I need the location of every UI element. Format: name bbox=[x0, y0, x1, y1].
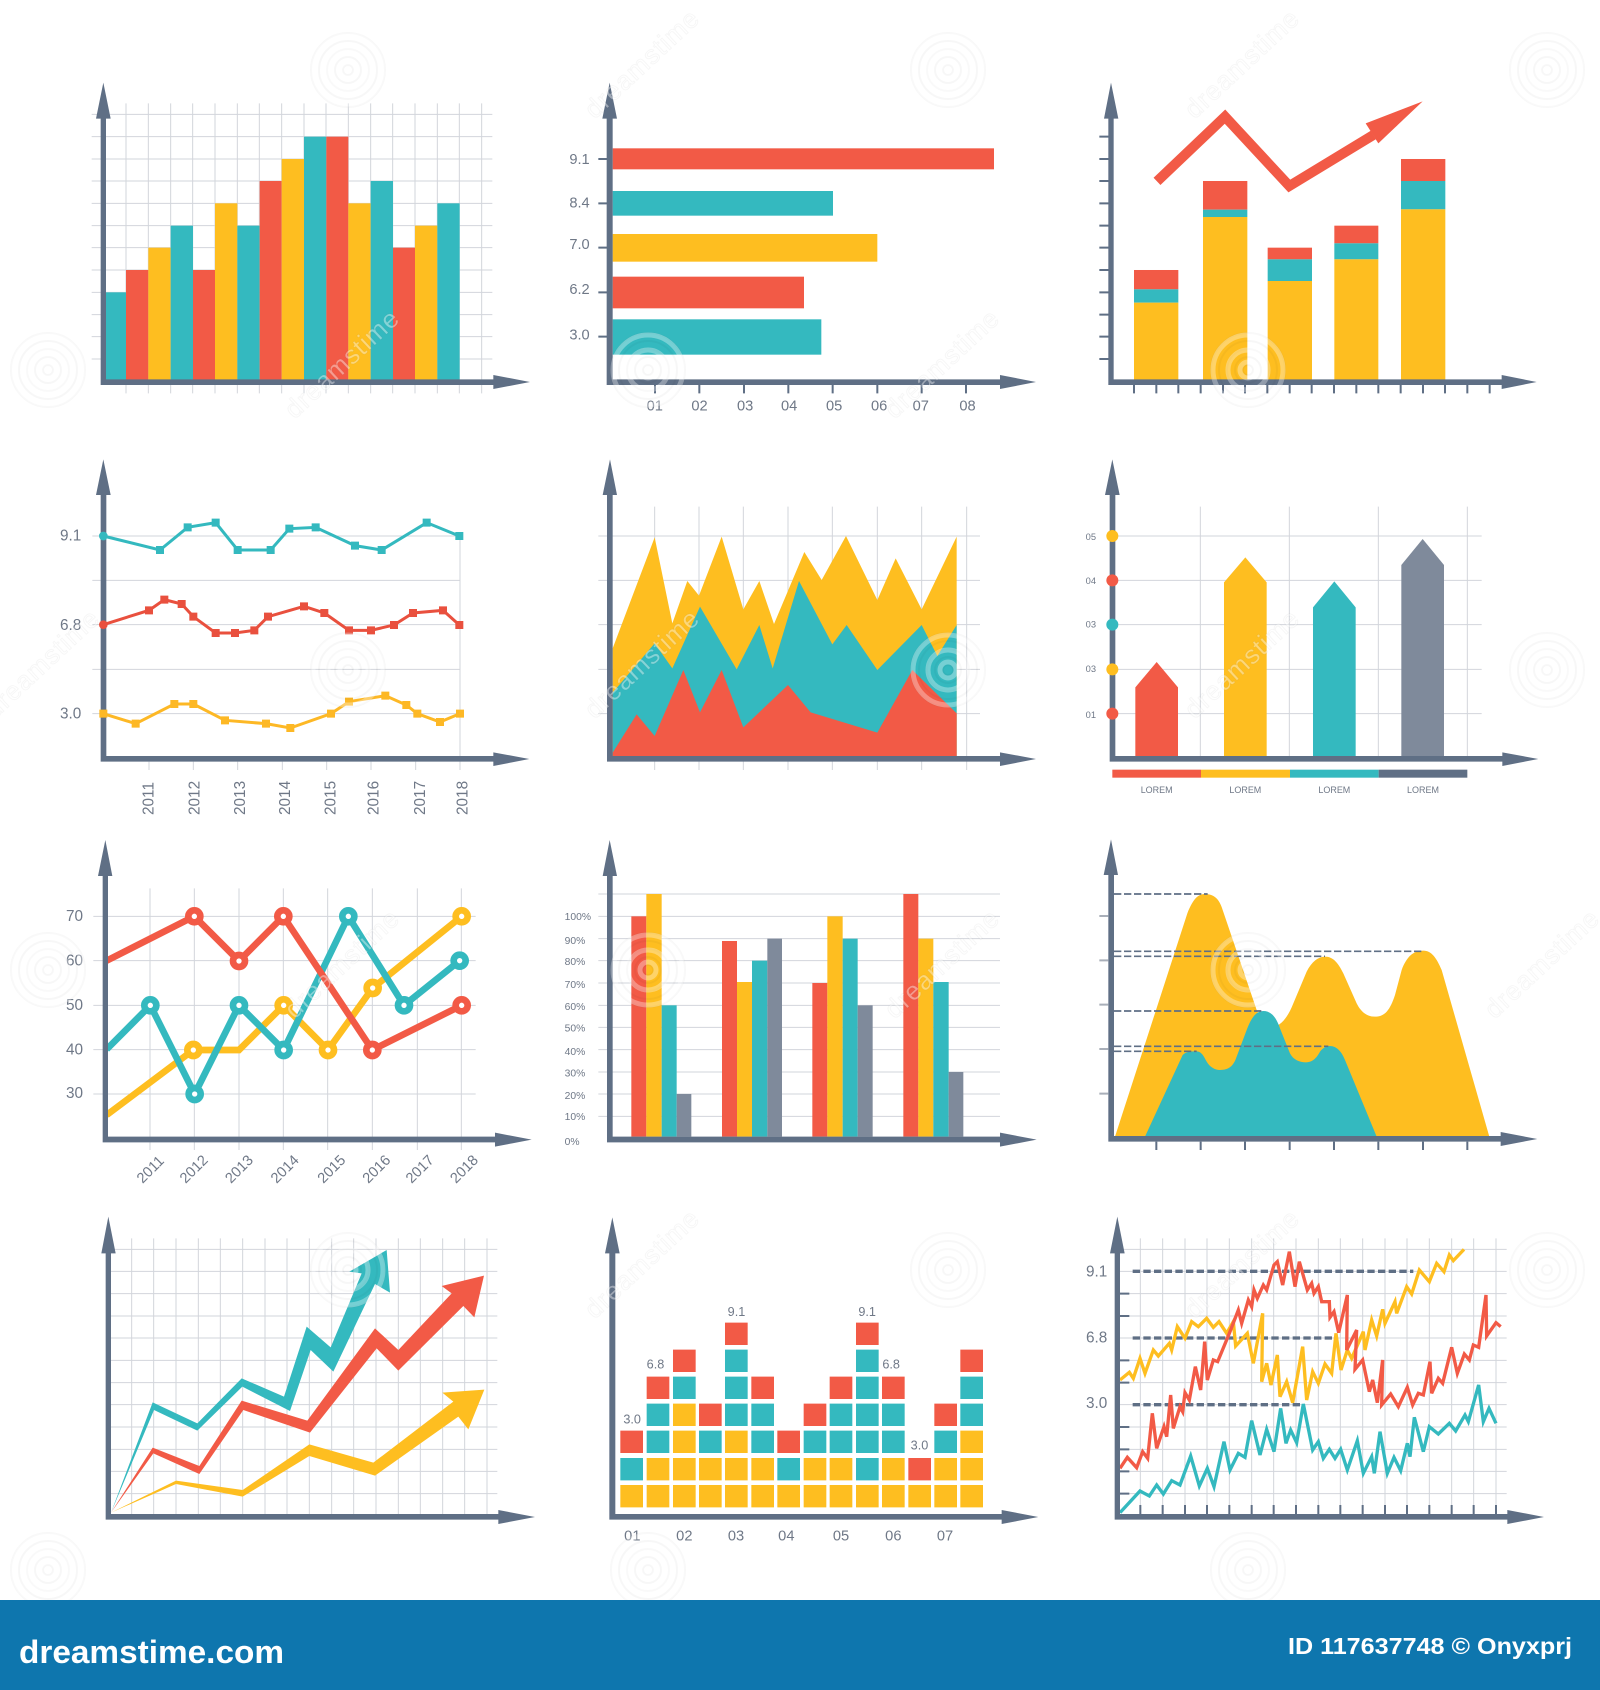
footer id credit: ID 117637748 © Onyxprj bbox=[1288, 1633, 1572, 1659]
axis labels: 2014 bbox=[268, 1152, 303, 1187]
axis labels: 50 bbox=[66, 997, 83, 1014]
axis labels: 3.0 bbox=[60, 705, 81, 722]
yellow area bbox=[613, 536, 957, 757]
axis labels: 2018 bbox=[454, 781, 471, 815]
percentage labels: 80% bbox=[565, 957, 585, 968]
y labels: 9.1 bbox=[1086, 1264, 1107, 1281]
red area bbox=[613, 670, 957, 757]
panel: stacked square blocks bbox=[605, 1217, 1038, 1545]
axis labels: 2017 bbox=[412, 781, 429, 815]
watermark wordmarks: dreamstime bbox=[878, 903, 1005, 1024]
panel: multicolour bar chart bbox=[92, 83, 530, 393]
red arrow bbox=[111, 1276, 484, 1513]
legend strip: LOREM bbox=[1141, 785, 1173, 795]
axis labels: 2018 bbox=[448, 1152, 482, 1187]
axes with arrows bbox=[1105, 459, 1538, 766]
axis labels bbox=[66, 908, 482, 1187]
footer bar bbox=[0, 1600, 1600, 1690]
axis labels: 70 bbox=[66, 908, 83, 925]
yellow arrow bbox=[111, 1390, 484, 1513]
y labels: 03 bbox=[1086, 620, 1096, 630]
axis labels: 01 bbox=[647, 399, 663, 415]
y labels: 3.0 bbox=[1086, 1395, 1107, 1412]
bar groups bbox=[631, 894, 963, 1137]
watermark wordmarks: dreamstime bbox=[1178, 1203, 1305, 1324]
teal area bbox=[613, 581, 957, 757]
axis labels: 8.4 bbox=[569, 195, 590, 211]
panel: line chart with ring markers bbox=[66, 840, 532, 1187]
axes with arrows bbox=[1104, 839, 1537, 1146]
axis labels: 2012 bbox=[177, 1152, 212, 1187]
yellow line bbox=[1120, 1249, 1464, 1403]
axes with arrows bbox=[605, 1217, 1038, 1524]
value and axis labels: 9.1 bbox=[858, 1305, 876, 1319]
y labels bbox=[1086, 1264, 1107, 1412]
legend strip: LOREM bbox=[1229, 785, 1261, 795]
value and axis labels: 04 bbox=[778, 1529, 794, 1545]
value and axis labels: 02 bbox=[676, 1529, 692, 1545]
value and axis labels: 05 bbox=[833, 1529, 849, 1545]
axis labels: 2013 bbox=[232, 781, 249, 815]
axis labels: 2017 bbox=[403, 1152, 438, 1187]
axis labels: 2016 bbox=[360, 1152, 394, 1187]
value and axis labels: 07 bbox=[937, 1529, 953, 1545]
bars bbox=[106, 137, 460, 380]
value and axis labels: 3.0 bbox=[911, 1438, 928, 1452]
red series bbox=[99, 596, 463, 637]
percentage labels: 10% bbox=[565, 1112, 585, 1123]
axis labels: 3.0 bbox=[569, 327, 590, 343]
panel: arrow columns with legend bbox=[1086, 459, 1538, 795]
y labels: 04 bbox=[1086, 576, 1096, 586]
panel: growth arrows on grid bbox=[101, 1217, 535, 1524]
teal series bbox=[99, 519, 463, 554]
percentage labels: 0% bbox=[565, 1137, 580, 1148]
axis labels: 30 bbox=[66, 1085, 83, 1102]
y labels: 03 bbox=[1086, 664, 1096, 674]
axis labels: 07 bbox=[913, 399, 929, 415]
value and axis labels: 01 bbox=[624, 1529, 640, 1545]
teal arrow bbox=[111, 1250, 390, 1513]
axis labels: 05 bbox=[826, 399, 842, 415]
axes with arrows bbox=[101, 1217, 535, 1524]
axis labels: 6.2 bbox=[569, 282, 590, 298]
watermark wordmarks: dreamstime bbox=[278, 303, 405, 424]
value and axis labels: 3.0 bbox=[623, 1412, 641, 1426]
axis labels: 08 bbox=[959, 399, 976, 415]
axes with arrows bbox=[96, 459, 529, 766]
axis labels: 2016 bbox=[365, 781, 382, 815]
legend strip: LOREM bbox=[1407, 785, 1439, 795]
watermark wordmarks: dreamstime bbox=[578, 1203, 705, 1324]
stacked bars bbox=[1134, 159, 1445, 380]
percentage labels: 70% bbox=[565, 980, 585, 991]
percentage labels: 90% bbox=[565, 936, 585, 947]
panel: layered area chart bbox=[598, 459, 1036, 770]
panel: grouped percentage bars bbox=[565, 840, 1037, 1148]
percentage labels bbox=[565, 912, 591, 1148]
y labels: 05 bbox=[1086, 532, 1096, 542]
watermark wordmarks: dreamstime bbox=[278, 903, 405, 1024]
axis labels: 04 bbox=[781, 399, 797, 415]
axis labels: 40 bbox=[66, 1042, 83, 1059]
panel: line chart with square markers bbox=[60, 459, 529, 815]
axis labels: 2011 bbox=[140, 782, 157, 815]
value and axis labels: 06 bbox=[885, 1529, 901, 1545]
panel: smooth mountain area chart bbox=[1099, 839, 1537, 1150]
axis labels: 2012 bbox=[186, 781, 203, 815]
percentage labels: 20% bbox=[565, 1091, 585, 1102]
yellow area bbox=[1115, 894, 1489, 1137]
watermark wordmarks: dreamstime bbox=[578, 603, 705, 724]
horizontal bars bbox=[613, 148, 994, 355]
yellow blocks bbox=[620, 1404, 983, 1507]
percentage labels: 40% bbox=[565, 1047, 585, 1058]
trend arrow bbox=[1157, 101, 1423, 186]
value and axis labels bbox=[623, 1305, 953, 1545]
axes with arrows bbox=[1110, 1217, 1544, 1524]
panel: volatile multi-line chart bbox=[1086, 1217, 1544, 1524]
y labels bbox=[1086, 532, 1096, 720]
watermark wordmarks: dreamstime bbox=[578, 3, 705, 124]
teal blocks bbox=[620, 1350, 983, 1480]
axes with arrows bbox=[603, 459, 1036, 766]
axis dots bbox=[1106, 530, 1118, 720]
teal line bbox=[1120, 1385, 1496, 1513]
yellow series bbox=[99, 692, 464, 732]
dashed guide lines bbox=[1114, 894, 1423, 1051]
value and axis labels: 6.8 bbox=[647, 1357, 664, 1371]
axis labels: 06 bbox=[871, 399, 887, 415]
axes with arrows bbox=[98, 840, 532, 1147]
teal area bbox=[1145, 1011, 1377, 1137]
axis labels: 2015 bbox=[322, 781, 339, 815]
axis labels: 2013 bbox=[223, 1152, 257, 1187]
axis labels bbox=[569, 152, 976, 415]
axis labels: 2014 bbox=[277, 780, 294, 815]
axis labels: 02 bbox=[691, 399, 708, 415]
watermark wordmarks bbox=[0, 3, 1600, 1324]
watermark wordmarks: dreamstime bbox=[878, 303, 1005, 424]
axis labels: 9.1 bbox=[60, 528, 81, 545]
axis labels: 60 bbox=[66, 953, 83, 970]
teal line bbox=[107, 910, 466, 1100]
percentage labels: 60% bbox=[565, 1002, 585, 1013]
percentage labels: 50% bbox=[565, 1024, 585, 1035]
value and axis labels: 6.8 bbox=[882, 1357, 900, 1371]
axis labels: 9.1 bbox=[569, 152, 590, 168]
axis labels: 2011 bbox=[134, 1153, 168, 1187]
axis labels: 03 bbox=[737, 399, 753, 415]
axis ticks bbox=[1120, 1294, 1496, 1514]
yellow line bbox=[107, 910, 468, 1115]
y labels: 01 bbox=[1086, 710, 1096, 720]
panel: stacked bars with trend arrow bbox=[1099, 83, 1537, 393]
axis labels: 6.8 bbox=[60, 617, 81, 634]
axis labels: 2015 bbox=[315, 1152, 349, 1187]
red blocks bbox=[620, 1323, 983, 1480]
value and axis labels: 9.1 bbox=[728, 1305, 745, 1319]
axes with arrows bbox=[96, 83, 530, 389]
percentage labels: 30% bbox=[565, 1069, 585, 1080]
dashed guide lines bbox=[1133, 1271, 1413, 1405]
percentage labels: 100% bbox=[565, 912, 591, 923]
axes with arrows bbox=[1099, 83, 1537, 389]
footer logo: dreamstime.com bbox=[19, 1634, 284, 1670]
legend strip bbox=[1112, 770, 1467, 795]
watermark wordmarks: dreamstime bbox=[1178, 603, 1305, 724]
panel: horizontal bar chart bbox=[569, 83, 1036, 415]
arrow columns bbox=[1135, 539, 1444, 756]
y labels: 6.8 bbox=[1086, 1329, 1107, 1346]
axis labels bbox=[60, 528, 471, 815]
legend strip: LOREM bbox=[1318, 785, 1350, 795]
red line bbox=[107, 910, 468, 1056]
watermark wordmarks: dreamstime bbox=[1178, 3, 1305, 124]
red line bbox=[1120, 1252, 1501, 1468]
axis labels: 7.0 bbox=[569, 237, 590, 253]
value and axis labels: 03 bbox=[728, 1529, 744, 1545]
axes with arrows bbox=[598, 83, 1036, 393]
axes with arrows bbox=[603, 840, 1037, 1147]
